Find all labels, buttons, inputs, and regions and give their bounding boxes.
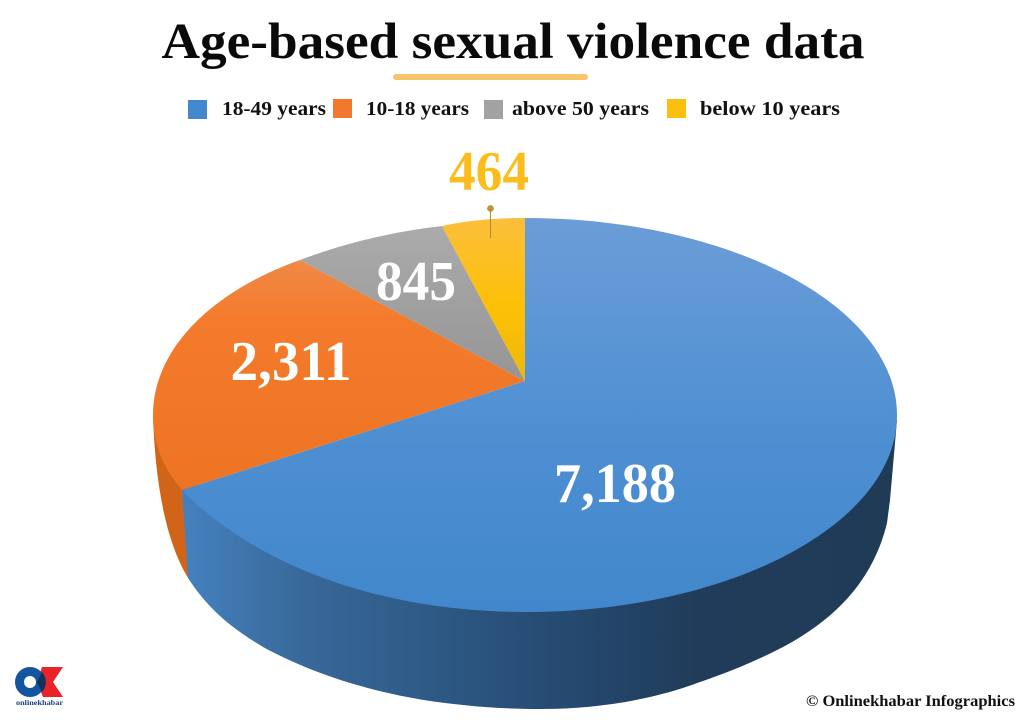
pie side: blue wall xyxy=(182,400,897,709)
pie slice: 18-49 years xyxy=(182,218,897,612)
legend item: 18-49 years: 18-49 years xyxy=(222,98,326,120)
leader line for 464 xyxy=(487,205,494,238)
logo K xyxy=(37,667,63,697)
value: 464: 464 xyxy=(449,141,529,203)
legend item: above 50 years: above 50 years xyxy=(512,98,649,120)
logo overlap xyxy=(37,672,46,692)
credit: © Onlinekhabar Infographics xyxy=(806,693,1015,710)
3D pie chart xyxy=(153,141,897,709)
pie slice: below 10 years xyxy=(442,218,525,381)
logo wordmark: onlinekhabar xyxy=(16,699,63,707)
legend item: 10-18 years: 10-18 years xyxy=(366,98,469,120)
title: Age-based sexual violence data xyxy=(162,14,864,70)
value: 2,311: 2,311 xyxy=(230,331,352,393)
pie slice: above 50 years xyxy=(300,226,525,381)
pie side: orange wall xyxy=(153,415,200,578)
legend xyxy=(188,98,840,120)
legend item: below 10 years: below 10 years xyxy=(700,98,840,120)
value: 845: 845 xyxy=(376,251,456,313)
pie slice: 10-18 years xyxy=(153,260,525,490)
logo O xyxy=(20,672,40,692)
logo: Onlinekhabar xyxy=(16,667,63,707)
title underline xyxy=(393,74,588,80)
value: 7,188: 7,188 xyxy=(554,453,676,515)
